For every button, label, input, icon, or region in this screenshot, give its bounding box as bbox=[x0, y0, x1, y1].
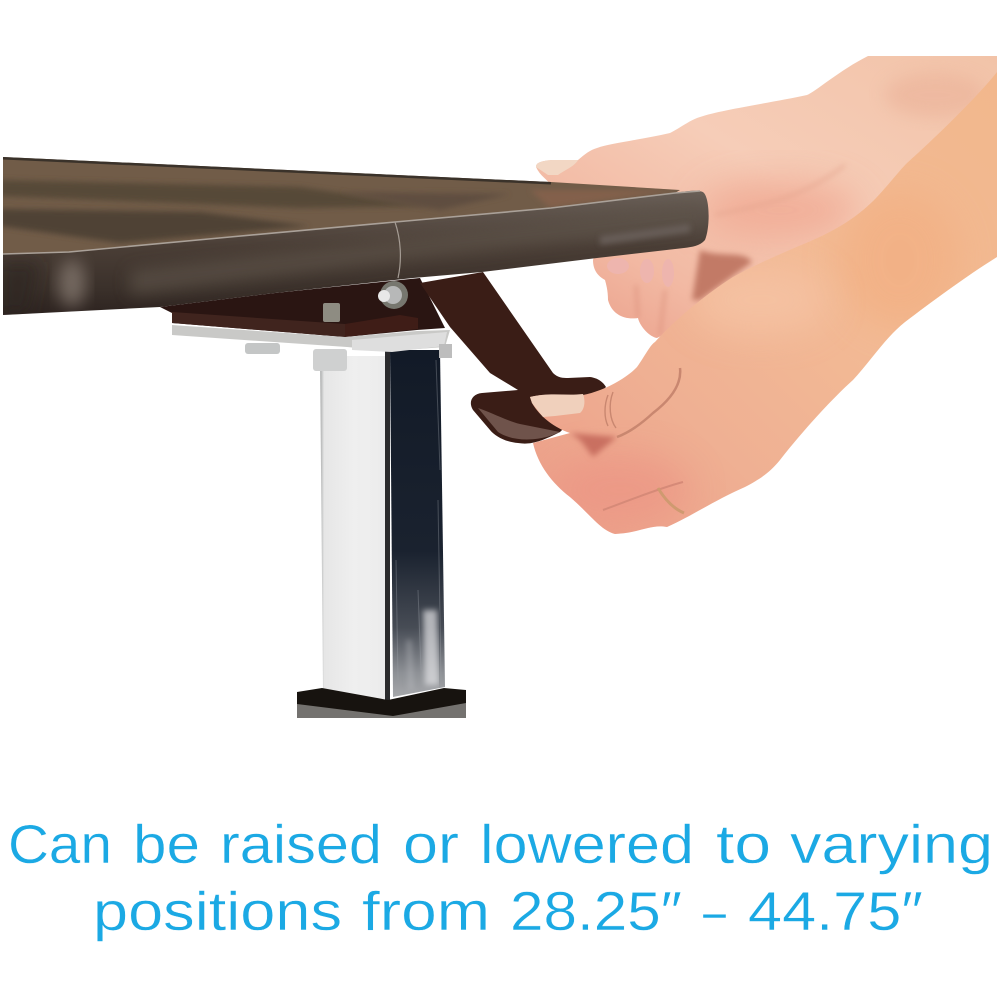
caption line one: or bbox=[403, 813, 459, 875]
release lever bbox=[420, 272, 606, 444]
caption line one: Can bbox=[8, 813, 112, 875]
silver plate bbox=[172, 325, 450, 351]
edge highlight line bbox=[3, 191, 700, 254]
mounting bracket bbox=[160, 278, 452, 371]
thumbnail on top of table bbox=[536, 160, 578, 175]
gap between thumb and fingers bbox=[570, 433, 617, 457]
caption line two bbox=[93, 880, 923, 942]
caption line one: raised bbox=[220, 813, 382, 875]
caption line one: be bbox=[133, 813, 200, 875]
column left chrome face bbox=[320, 356, 388, 700]
table edge bbox=[3, 191, 709, 315]
caption line two: positions bbox=[93, 880, 342, 942]
wood surface bbox=[3, 157, 680, 254]
hex nuts bbox=[245, 343, 280, 354]
caption line one: lowered bbox=[480, 813, 694, 875]
table top bbox=[0, 150, 720, 315]
column base collar bbox=[297, 688, 466, 718]
seam bbox=[395, 222, 400, 278]
bolts bbox=[323, 303, 340, 322]
caption bbox=[8, 813, 993, 942]
caption line two: from bbox=[362, 880, 490, 942]
back hand gripping the table bbox=[536, 56, 997, 338]
caption line two: 28.25″ bbox=[510, 880, 682, 942]
caption line one: to bbox=[716, 813, 771, 875]
table support column bbox=[297, 350, 466, 718]
caption line one bbox=[8, 813, 993, 875]
caption line two: 44.75″ bbox=[748, 880, 923, 942]
front hand and arm bbox=[530, 72, 997, 534]
fingernails under table bbox=[607, 258, 674, 287]
caption line two: – bbox=[703, 880, 726, 942]
column right dark chrome face bbox=[390, 350, 445, 697]
gold ring bbox=[658, 488, 684, 513]
thumb nail bbox=[530, 394, 584, 417]
caption line one: varying bbox=[790, 813, 993, 875]
